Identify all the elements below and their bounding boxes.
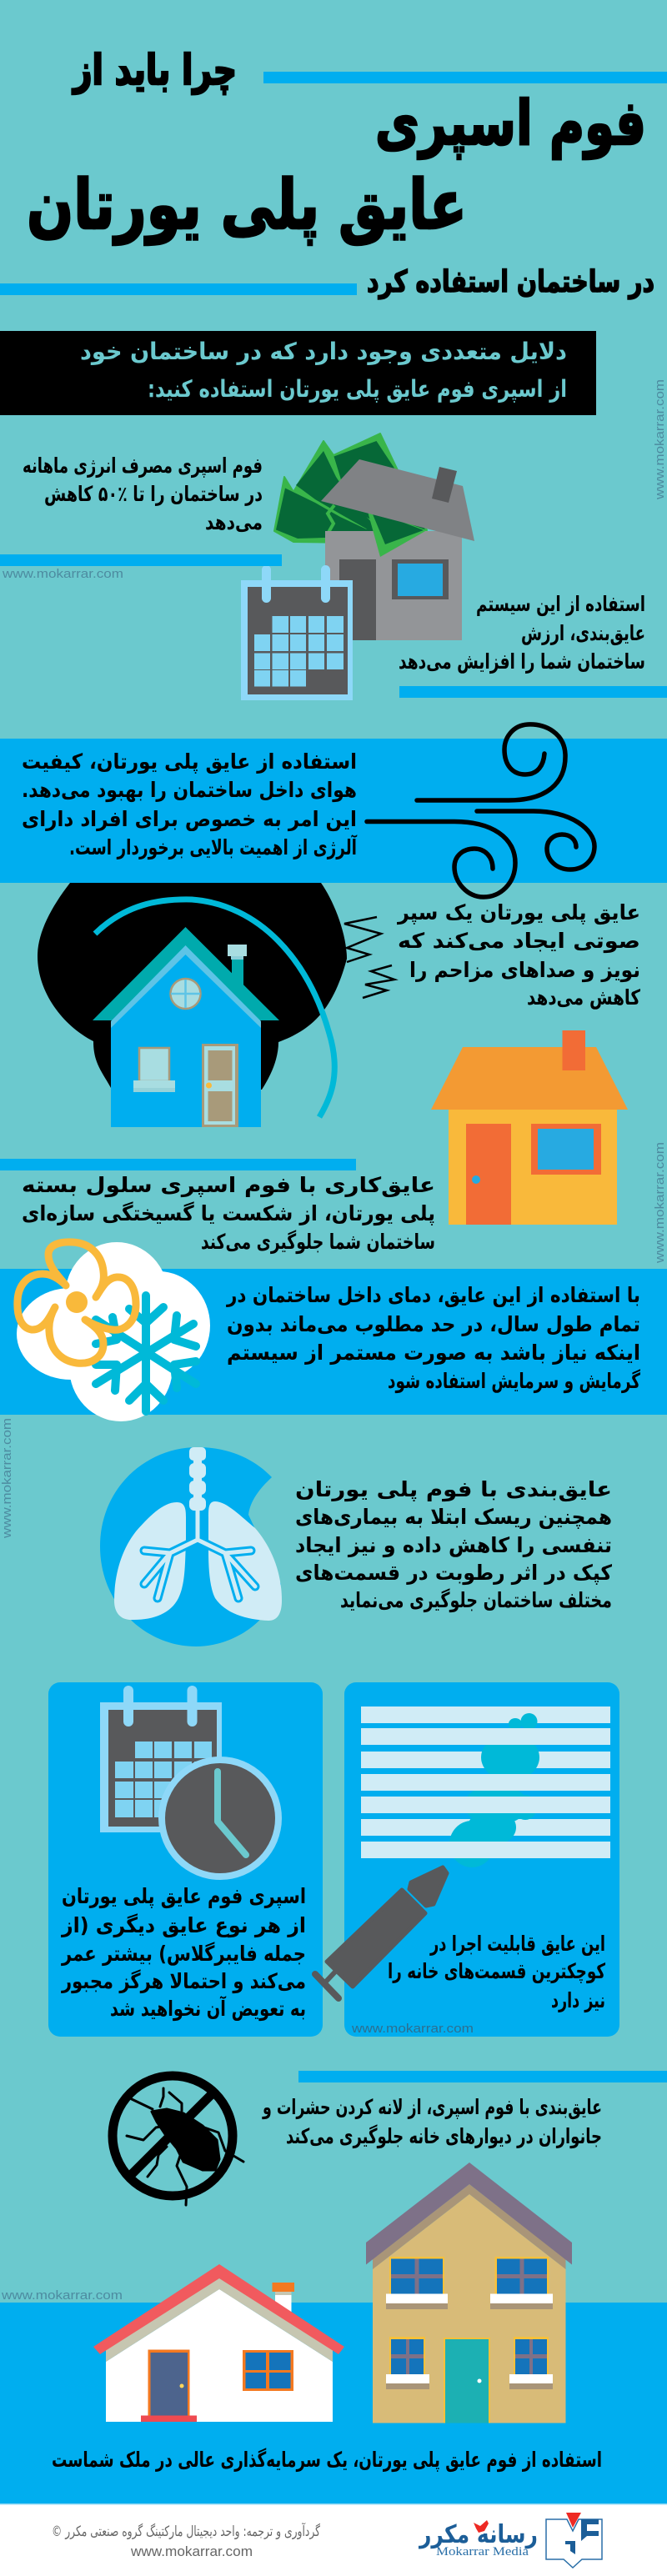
text: lifetime: می‌کند و احتمالا هرگز مجبور xyxy=(60,1969,306,1994)
text: small spaces: نیز دارد xyxy=(551,1988,605,2013)
logo: Mokarrar Media xyxy=(436,2545,529,2558)
panel: air quality band: استفاده از عایق پلی یورتان، کیفیت xyxy=(22,749,357,774)
text: sound barrier xyxy=(396,900,640,1010)
title xyxy=(0,46,667,299)
icon: orange house xyxy=(431,1030,628,1225)
icon: lungs xyxy=(100,1447,282,1646)
text: pests xyxy=(262,2071,667,2149)
panel: temperature band: اینکه نیاز باشد به صورت مستمر از سیستم xyxy=(227,1341,640,1366)
icon: no bugs xyxy=(113,2076,243,2205)
text: lifetime xyxy=(60,1884,306,2022)
text: sound barrier: عایق پلی یورتان یک سپر xyxy=(396,900,640,925)
panel: air quality band: آلرژی از اهمیت بالایی برخوردار است.‏ xyxy=(69,834,358,860)
footer: گردآوری و ترجمه: واحد دیجیتال مارکتینگ گروه صنعتی مکرر ©‏ xyxy=(52,2522,321,2540)
panel: durability xyxy=(48,1682,323,2037)
title: چرا باید از xyxy=(72,46,237,95)
intro box xyxy=(0,331,596,415)
text: energy saving: می‌دهد xyxy=(205,510,263,534)
text: respiratory: تنفسی را کاهش داده و نیز ایجاد xyxy=(295,1533,612,1558)
icon: white house xyxy=(93,2264,344,2422)
text: lifetime: به تعویض آن نخواهید شد xyxy=(110,1996,306,2022)
intro box: از اسپری فوم عایق پلی یورتان استفاده کنید:‏ xyxy=(148,375,567,403)
watermark: www.mokarrar.com xyxy=(351,2022,474,2036)
text: structural: ساختمان شما جلوگیری می‌کند xyxy=(201,1230,435,1255)
text: small spaces xyxy=(388,1932,605,2013)
footer xyxy=(0,2503,667,2576)
watermark vertical right: www.mokarrar.com xyxy=(653,1142,667,1264)
icon: house with money and calendar xyxy=(241,434,474,700)
icon: tan house xyxy=(366,2163,572,2423)
text: sound barrier: نویز و صداهای مزاحم را xyxy=(409,958,640,983)
text: sound barrier: صوتی ایجاد می‌کند که xyxy=(398,929,640,954)
panel: temperature band: تمام طول سال، در حد مطلوب می‌ماند بدون xyxy=(227,1312,640,1337)
text: sound barrier: کاهش می‌دهد xyxy=(527,985,640,1010)
intro box: دلایل متعددی وجود دارد که در ساختمان خود xyxy=(80,338,567,365)
text: building value xyxy=(399,592,667,698)
text: structural: عایق‌کاری با فوم اسپری سلول بسته xyxy=(22,1173,435,1198)
icon: blue house with sound shield xyxy=(93,900,334,1127)
icon: wind xyxy=(367,724,594,897)
icon: foam gun xyxy=(315,1867,447,1998)
logo: رسانه مکرر xyxy=(418,2520,538,2549)
footer: www.mokarrar.com xyxy=(130,2543,253,2559)
icon: black sound blob xyxy=(38,883,347,1090)
text: energy saving: فوم اسپری مصرف انرژی ماهانه xyxy=(23,454,263,479)
watermark vertical right top: www.mokarrar.com xyxy=(653,379,667,500)
text: energy saving xyxy=(0,454,282,566)
text: lifetime: جمله فایبرگلاس) بیشتر عمر xyxy=(60,1942,306,1967)
icon: cloud with fan and snowflake xyxy=(17,1242,210,1421)
panel: bottom band xyxy=(0,2303,667,2503)
text: energy saving: در ساختمان را تا ٪۵۰ کاهش xyxy=(44,482,263,506)
text: lifetime: از هر نوع عایق دیگری (از xyxy=(60,1913,306,1938)
panel: air quality band: این امر به خصوص برای افراد دارای xyxy=(22,807,357,832)
panel: air quality band: هوای داخل ساختمان را بهبود می‌دهد.‏ xyxy=(22,778,357,803)
watermark: www.mokarrar.com xyxy=(1,2288,123,2303)
text: respiratory: کپک در اثر رطوبت در قسمت‌های xyxy=(295,1561,612,1586)
title: عایق پلی یورتان xyxy=(27,166,467,245)
text: structural: پلی یورتان، از شکست یا گسیختگی سازه‌ای xyxy=(22,1201,435,1226)
icon: noise zigzags xyxy=(344,917,394,998)
panel: air quality band xyxy=(0,739,667,883)
panel: temperature band xyxy=(0,1269,667,1415)
text: respiratory xyxy=(295,1477,612,1613)
text: structural xyxy=(0,1159,435,1255)
watermark vertical left: www.mokarrar.com xyxy=(0,1418,14,1539)
logo xyxy=(418,2513,602,2568)
text: lifetime: اسپری فوم عایق پلی یورتان xyxy=(62,1884,306,1909)
text: respiratory: همچنین ریسک ابتلا به بیماری‌های xyxy=(295,1505,612,1530)
watermark: www.mokarrar.com xyxy=(2,567,123,581)
icon: calendar and clock xyxy=(100,1686,282,1880)
panel: small spaces xyxy=(315,1682,619,2037)
text: respiratory: عایق‌بندی با فوم پلی یورتان xyxy=(295,1477,612,1502)
